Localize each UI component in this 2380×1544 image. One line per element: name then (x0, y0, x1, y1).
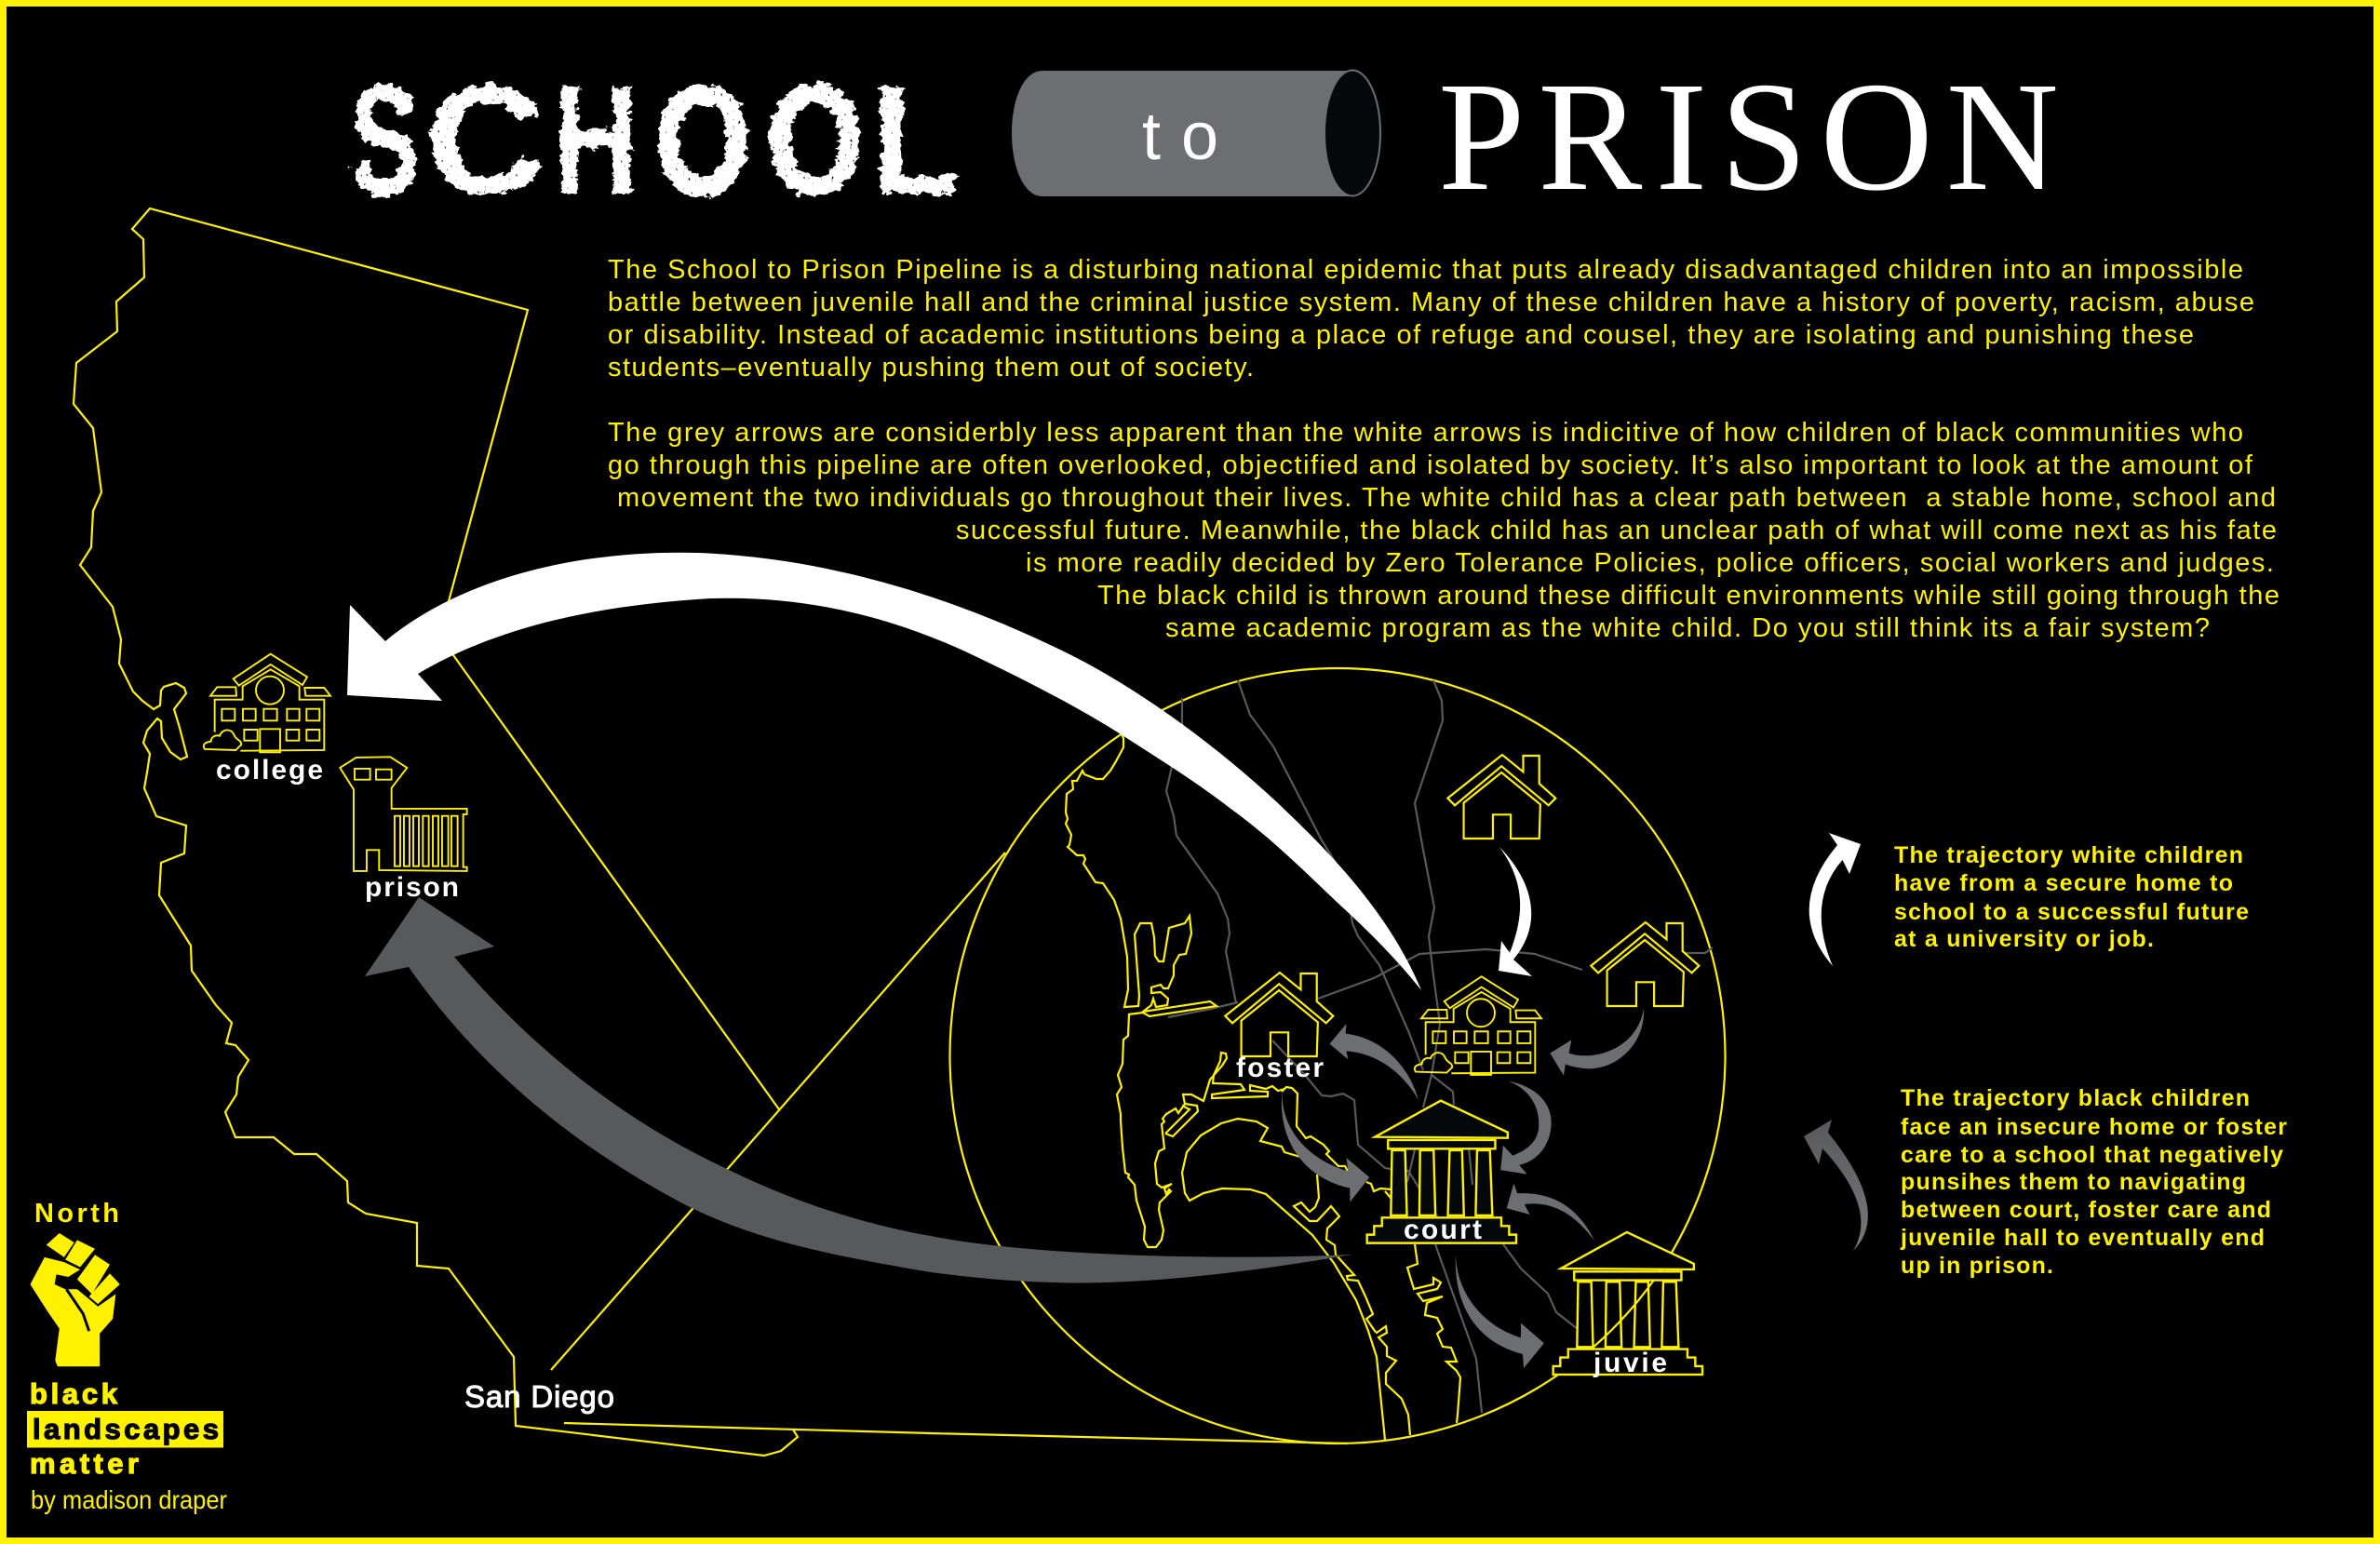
label: court: court (1404, 1215, 1482, 1245)
title: pipe with to: to (1142, 100, 1218, 174)
title: SCHOOL: L (871, 54, 960, 227)
title: PRISON: PRISON (1438, 50, 2059, 223)
caption: white trajectory: have from a secure home to (1894, 870, 2233, 896)
arrow: insecure home to school (1550, 1008, 1644, 1076)
arrow: juvie to court (1507, 1184, 1594, 1241)
logo: black landscapes matter: matter (30, 1447, 139, 1480)
intro paragraph (608, 255, 2254, 383)
arrow: court to foster (1329, 1024, 1419, 1100)
label: San Diego: San Diego (464, 1379, 614, 1414)
caption: black trajectory: care to a school that negatively (1901, 1142, 2283, 1168)
icon: prison (340, 757, 467, 871)
San Diego roads (1166, 680, 1713, 1413)
arrow: school to court (1500, 1081, 1552, 1175)
icon: raised fist (31, 1233, 120, 1366)
intro paragraph: battle between juvenile hall and the criminal justice system. Many of these children have a history of poverty, racism, abuse (608, 288, 2254, 317)
caption: black trajectory: The trajectory black children (1901, 1085, 2250, 1111)
explanation paragraph: is more readily decided by Zero Tolerance Policies, police officers, social workers and judges. (1026, 548, 2274, 578)
logo: black landscapes matter (27, 1377, 223, 1480)
icon: court (1367, 1101, 1516, 1243)
legend arrow: grey trajectory (1804, 1120, 1868, 1251)
title: SCHOOL: S (350, 54, 420, 227)
San Diego coastline (1066, 734, 1460, 1440)
label: foster: foster (1236, 1053, 1324, 1083)
title: SCHOOL: O (767, 54, 864, 227)
caption: white trajectory (1894, 842, 2249, 952)
icon: college (204, 654, 330, 752)
arrow: foster to court (1282, 1091, 1369, 1202)
icon: insecure home (1591, 922, 1699, 1006)
label: juvie: juvie (1593, 1348, 1667, 1378)
label: North: North (34, 1199, 119, 1228)
grey trajectory arrows in circle (1282, 1008, 1644, 1368)
arrow: big white arrow to college (347, 553, 1421, 990)
caption: black trajectory: juvenile hall to eventually end (1900, 1225, 2265, 1251)
title: pipe with to (1012, 71, 1380, 196)
arrow: white home to school (1499, 847, 1532, 976)
caption: black trajectory: between court, foster care and (1901, 1197, 2271, 1223)
caption: white trajectory: The trajectory white children (1894, 842, 2243, 868)
credit: by madison draper: by madison draper (31, 1485, 227, 1514)
intro paragraph: The School to Prison Pipeline is a disturbing national epidemic that puts already disadvantaged children into an impossible (608, 255, 2243, 285)
explanation paragraph: same academic program as the white child. Do you still think its a fair system? (1165, 613, 2210, 643)
arrow: big grey arrow to prison (365, 897, 1352, 1282)
caption: black trajectory: punsihes them to navigating (1901, 1169, 2246, 1195)
explanation paragraph: movement the two individuals go throughout their lives. The white child has a clear path between a stable home, school and (617, 483, 2276, 513)
title: SCHOOL: H (553, 54, 639, 227)
label: college: college (216, 755, 323, 785)
title: SCHOOL: C (425, 52, 545, 227)
title: SCHOOL (350, 52, 960, 227)
title: SCHOOL: O (654, 54, 751, 227)
explanation paragraph (608, 418, 2279, 643)
icon: school (1415, 976, 1541, 1075)
caption: black trajectory (1900, 1085, 2287, 1279)
label: prison: prison (365, 872, 459, 903)
California map outline (74, 208, 1348, 1456)
caption: black trajectory: up in prison. (1901, 1253, 2053, 1279)
explanation paragraph: go through this pipeline are often overlooked, objectified and isolated by society. It’s also important to look at the amount of (608, 450, 2253, 480)
legend arrow: white trajectory (1809, 833, 1861, 966)
intro paragraph: students–eventually pushing them out of society. (608, 353, 1254, 383)
icon: white home (1447, 755, 1555, 839)
explanation paragraph: successful future. Meanwhile, the black child has an unclear path of what will come next as his fate (956, 516, 2277, 545)
caption: black trajectory: face an insecure home or foster (1901, 1114, 2287, 1140)
arrow: court to juvie (1456, 1255, 1544, 1368)
caption: white trajectory: at a university or job. (1894, 926, 2154, 952)
logo: black landscapes matter: black (30, 1377, 118, 1410)
San Diego zoom circle (949, 668, 1726, 1443)
logo: black landscapes matter: landscapes (33, 1413, 219, 1445)
explanation paragraph: The black child is thrown around these difficult environments while still going through the (1097, 581, 2279, 611)
icon: foster house (1225, 973, 1333, 1056)
icon: juvie (1553, 1232, 1702, 1375)
caption: white trajectory: school to a successful future (1894, 899, 2249, 925)
intro paragraph: or disability. Instead of academic institutions being a place of refuge and cousel, they are isolating and punishing these (608, 320, 2194, 350)
explanation paragraph: The grey arrows are considerbly less apparent than the white arrows is indicitive of how children of black communities who (608, 418, 2243, 448)
